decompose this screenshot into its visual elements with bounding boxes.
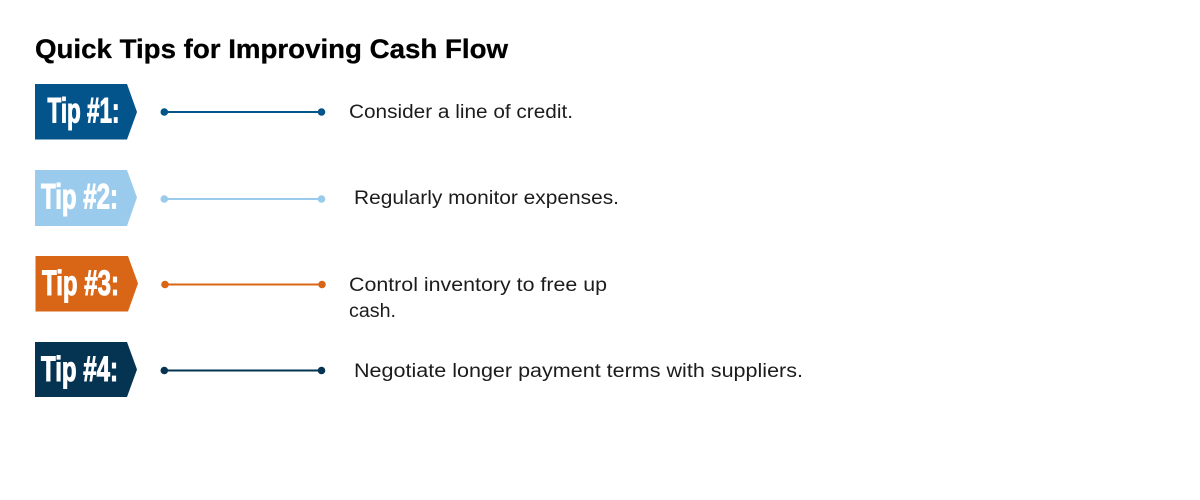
tip 3 row (36, 256, 607, 322)
tip 2 badge (35, 170, 137, 226)
tip 2 connector (160, 195, 325, 203)
tip 4 badge: Tip #4: (41, 350, 118, 389)
tip 1 text: Consider a line of credit. (349, 102, 573, 123)
tip 3 text: cash. (349, 301, 396, 322)
tip 3 text (349, 275, 607, 322)
tip 4 text: Negotiate longer payment terms with suppliers. (354, 361, 803, 382)
tip 2 text: Regularly monitor expenses. (354, 188, 619, 209)
tip 3 connector (161, 281, 326, 288)
tip 4 row (35, 342, 803, 397)
tip 3 text: Control inventory to free up (349, 275, 607, 296)
title: Quick Tips for Improving Cash Flow (35, 34, 509, 64)
tip 2 badge: Tip #2: (41, 178, 118, 216)
tip 3 badge (36, 256, 138, 312)
tip 1 connector (160, 108, 325, 116)
tip 2 row (35, 170, 619, 226)
tip 4 connector (160, 367, 325, 374)
tip 1 badge: Tip #1: (48, 92, 120, 130)
tip 4 badge (35, 342, 137, 397)
tip 1 badge (35, 84, 137, 140)
tip 1 row (35, 84, 573, 140)
tip 3 badge: Tip #3: (42, 264, 119, 303)
